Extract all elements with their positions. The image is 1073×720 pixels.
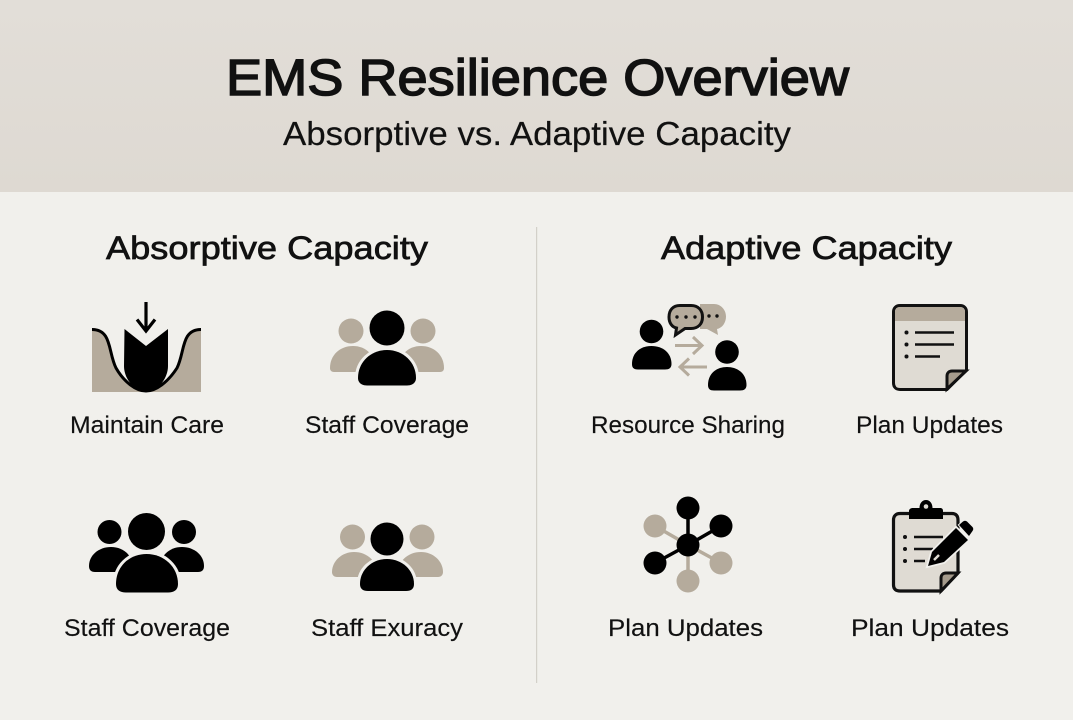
icon: staff coverage tan (330, 310, 444, 386)
icon: clipboard with pencil (894, 500, 973, 591)
label: maintain care: Maintain Care (70, 412, 224, 439)
heading: adaptive capacity: Adaptive Capacity (661, 230, 952, 266)
title: EMS Resilience Overview (226, 49, 849, 106)
icon: network (644, 496, 732, 592)
label: plan updates: Plan Updates (851, 615, 1009, 642)
center divider (536, 227, 537, 683)
header band (0, 0, 1073, 192)
label: staff coverage: Staff Coverage (305, 412, 469, 439)
panel: adaptive capacity (591, 230, 1009, 642)
label: staff coverage: Staff Coverage (64, 615, 230, 642)
icon: staff tan second (332, 522, 443, 591)
subtitle: Absorptive vs. Adaptive Capacity (283, 115, 792, 152)
icon: maintain care (92, 302, 201, 392)
label: plan updates: Plan Updates (608, 615, 763, 642)
icon: plan updates note (894, 306, 966, 390)
heading: absorptive capacity: Absorptive Capacity (106, 230, 428, 266)
icon: resource sharing (632, 304, 746, 390)
label: staff exuracy: Staff Exuracy (311, 615, 463, 642)
label: resource sharing: Resource Sharing (591, 412, 785, 439)
label: plan updates: Plan Updates (856, 412, 1003, 439)
icon: staff coverage black (89, 513, 204, 592)
panel: absorptive capacity (64, 230, 469, 642)
